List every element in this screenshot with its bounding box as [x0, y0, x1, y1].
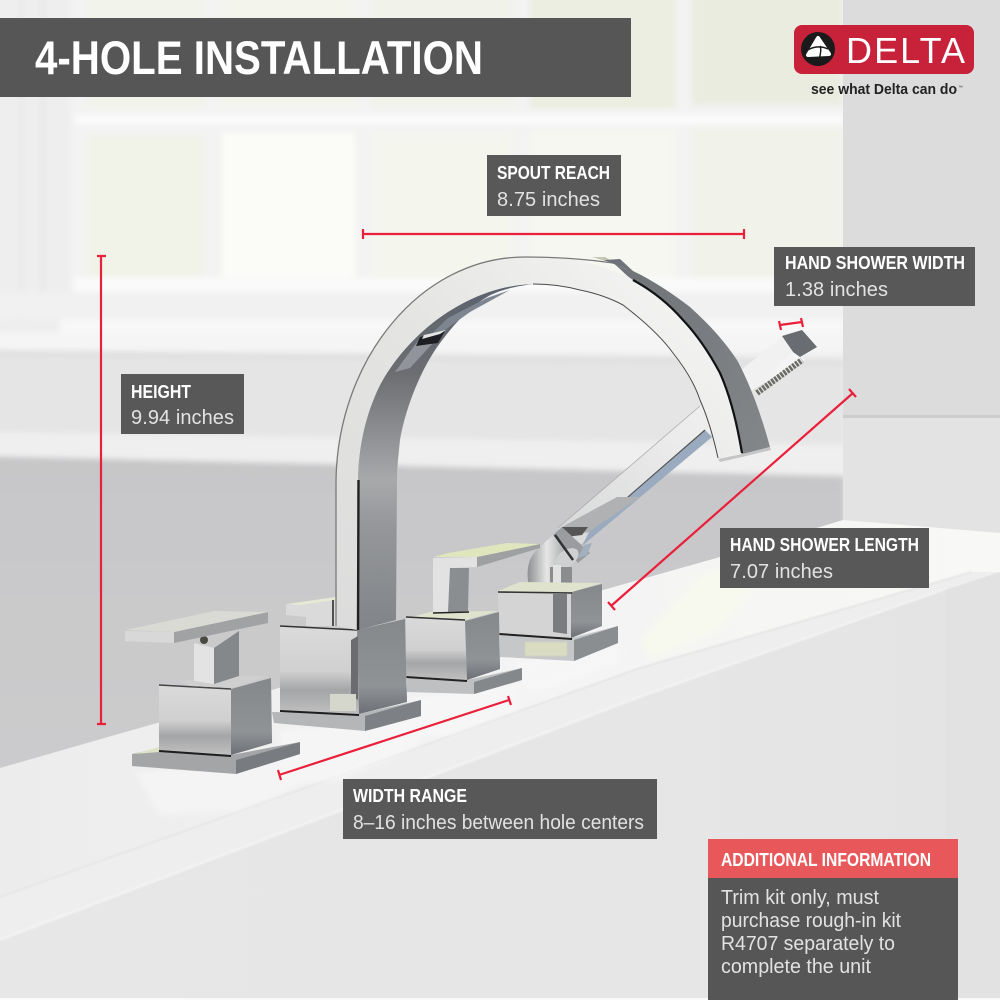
- panel text: purchase rough-in kit: [721, 910, 901, 932]
- label: height: [121, 374, 244, 434]
- label: height: HEIGHT: [131, 381, 192, 402]
- label: spout reach: [487, 155, 621, 216]
- label: hand shower length: 7.07 inches: [730, 561, 833, 583]
- label: spout reach: 8.75 inches: [497, 189, 600, 211]
- wand mount: [528, 527, 592, 589]
- label: width range: [343, 779, 657, 839]
- logo badge: [794, 25, 974, 74]
- counter top surface: [0, 520, 1000, 897]
- logo emblem: [801, 32, 835, 66]
- wand: [558, 337, 805, 547]
- right handle: [498, 582, 618, 661]
- spout front face: [336, 257, 742, 630]
- title banner: [0, 18, 631, 97]
- label: hand shower length: [720, 528, 929, 588]
- height line: [97, 256, 106, 724]
- counter: [0, 520, 1000, 1000]
- stem side: [358, 479, 397, 630]
- label: hand shower width: 1.38 inches: [785, 279, 888, 301]
- title banner: 4-HOLE INSTALLATION: [35, 31, 483, 84]
- block: [159, 678, 272, 755]
- stem: [194, 643, 214, 684]
- spout top reflections: [592, 257, 628, 270]
- counter window reflection: [640, 545, 790, 660]
- counter lip: [0, 572, 1000, 940]
- panel heading: [708, 839, 958, 878]
- hand shower: [528, 330, 817, 589]
- left handle: [125, 611, 300, 774]
- hand shower length line: [608, 389, 856, 610]
- width range line: [278, 696, 511, 780]
- spout base block: [272, 597, 421, 731]
- label: height: 9.94 inches: [131, 407, 234, 429]
- label: spout reach: SPOUT REACH: [497, 162, 610, 183]
- base plate: [272, 700, 421, 731]
- logo wordmark: DELTA: [846, 30, 965, 71]
- label: hand shower width: [774, 247, 975, 306]
- dimension lines: [97, 229, 856, 780]
- panel: additional information: [708, 839, 958, 1000]
- spout reach line: [363, 229, 744, 239]
- label: hand shower length: HAND SHOWER LENGTH: [730, 534, 919, 555]
- label: width range: WIDTH RANGE: [353, 785, 467, 806]
- label: hand shower width: HAND SHOWER WIDTH: [785, 252, 965, 273]
- diverter lever: [286, 597, 336, 626]
- counter front face: [0, 575, 1000, 1000]
- label: width range: 8–16 inches between hole centers: [353, 812, 644, 834]
- spout arc: [336, 257, 771, 630]
- right column: [843, 0, 1000, 533]
- lever: [174, 612, 268, 643]
- shower head: [782, 330, 817, 357]
- panel text: [721, 887, 901, 978]
- trademark mark: ™: [958, 85, 963, 91]
- spout end outer face: [613, 263, 770, 455]
- tagline: see what Delta can do: [811, 82, 957, 98]
- middle handle: [406, 543, 540, 694]
- middle lever: [433, 557, 477, 613]
- panel text: Trim kit only, must: [721, 887, 879, 909]
- base plate: [132, 742, 300, 774]
- panel body: [708, 878, 958, 1000]
- spout underside: [358, 284, 533, 480]
- logo: Delta: [794, 25, 974, 98]
- block: [280, 619, 407, 714]
- panel text: R4707 separately to: [721, 933, 895, 955]
- spray face: [757, 360, 802, 393]
- faucet reflections: [135, 647, 620, 815]
- hand shower width line: [779, 318, 803, 330]
- panel text: complete the unit: [721, 956, 871, 978]
- panel heading: ADDITIONAL INFORMATION: [721, 849, 931, 870]
